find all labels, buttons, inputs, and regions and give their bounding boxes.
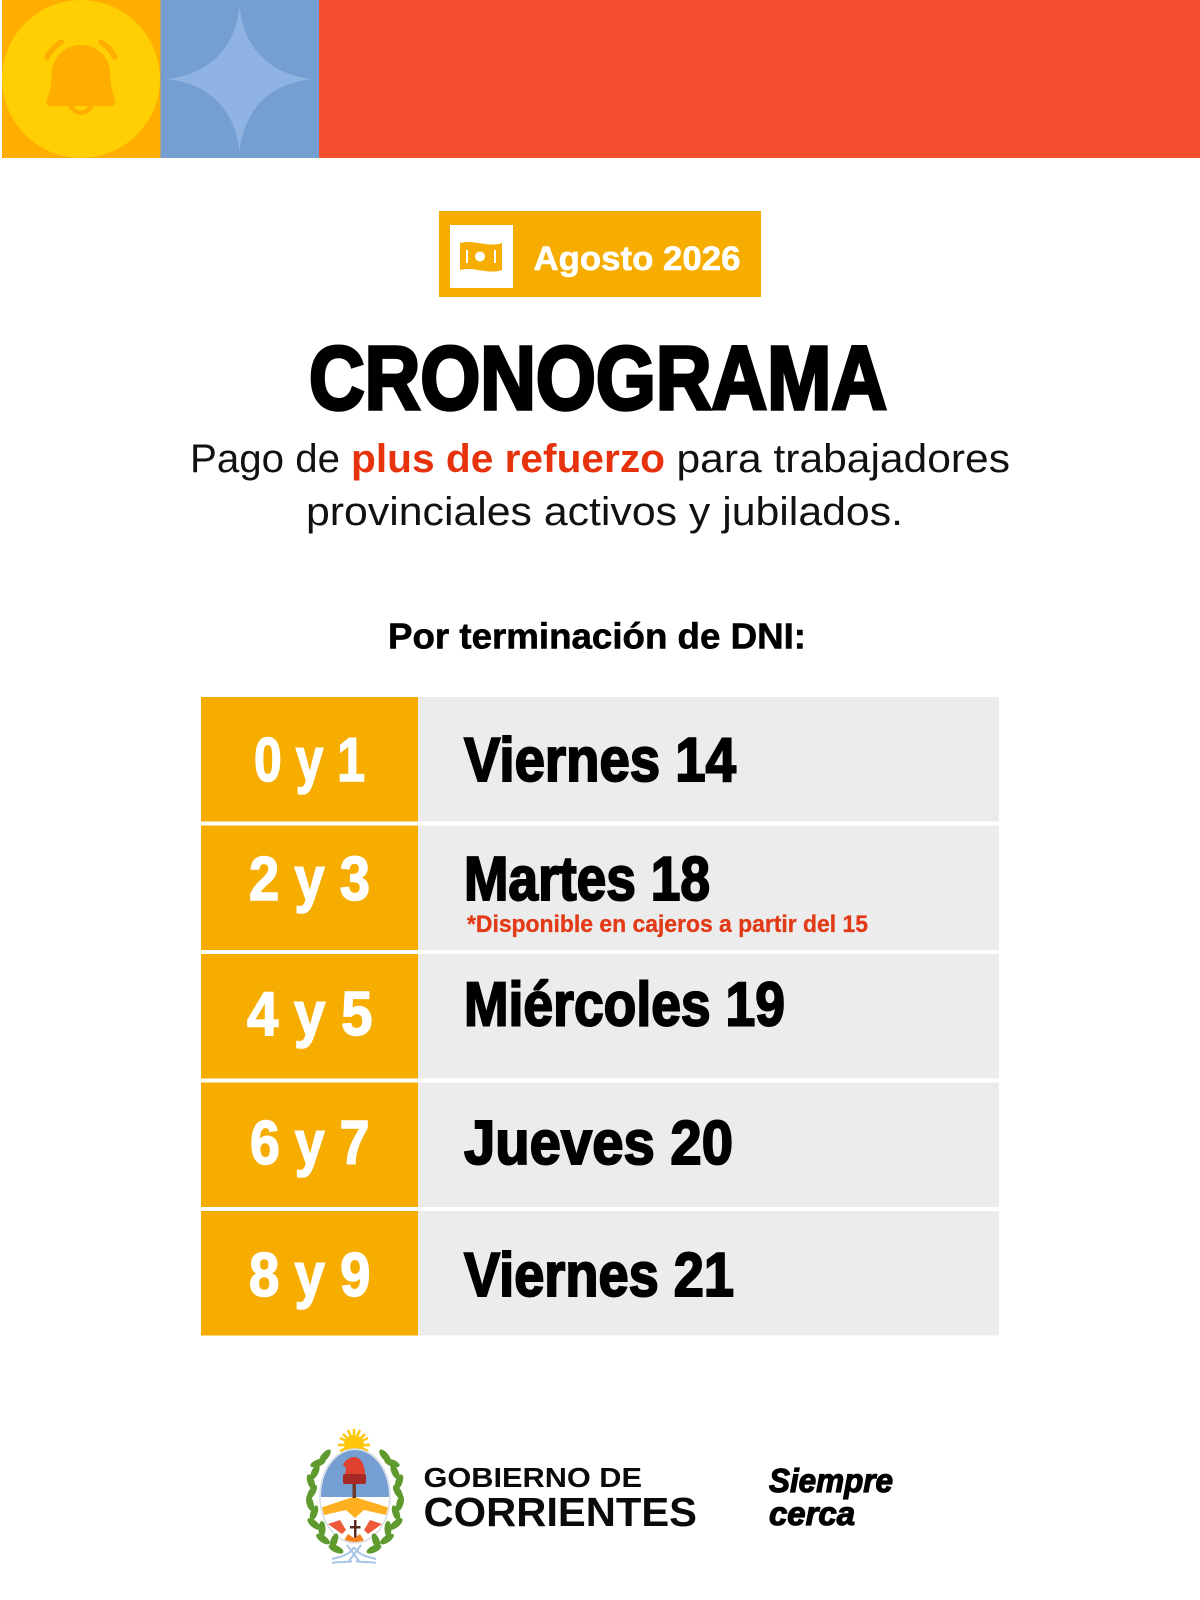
sun: [338, 1429, 370, 1457]
row: 2 y 3: 2 y 3: [249, 845, 370, 914]
row: 6 y 7: [201, 1082, 999, 1207]
subtitle: Pago de: [190, 437, 340, 481]
title: CRONOGRAMA: [309, 329, 887, 429]
slogan: Siempre: [769, 1462, 893, 1499]
slogan: cerca: [769, 1495, 855, 1532]
month badge: [439, 211, 761, 297]
row: 4 y 5: 4 y 5: [247, 980, 372, 1049]
ribbon: [332, 1545, 376, 1563]
row: 4 y 5: [201, 954, 999, 1078]
right branch: [365, 1448, 405, 1556]
row: 6 y 7: Jueves 20: [464, 1109, 733, 1178]
row: 8 y 9: Viernes 21: [464, 1241, 734, 1310]
shield: [320, 1449, 390, 1543]
row: 8 y 9: [201, 1211, 999, 1336]
laurel wreath: [305, 1448, 405, 1556]
subtitle: para trabajadores: [676, 437, 1010, 481]
row: 0 y 1: Viernes 14: [464, 726, 736, 795]
badge text: Agosto 2026: [534, 240, 740, 278]
subtitle: plus de refuerzo: [351, 437, 665, 481]
left branch: [305, 1448, 345, 1556]
footer logo: wordmark: [424, 1462, 697, 1535]
panel: bell tile: [2, 0, 160, 158]
subtitle: [190, 437, 1010, 534]
footer logo: coat of arms: [305, 1429, 405, 1563]
subtitle: provinciales activos y jubilados.: [306, 490, 903, 534]
icon: four-point star: [166, 5, 313, 153]
note: *Disponible en cajeros a partir del 15: [467, 911, 868, 938]
row: 0 y 1: [201, 697, 999, 822]
row: 2 y 3: Martes 18: [464, 845, 710, 914]
row: 2 y 3: [201, 826, 999, 950]
panel: red band: [319, 0, 1200, 158]
panel: star tile: [160, 0, 319, 158]
row: 4 y 5: Miércoles 19: [464, 970, 785, 1040]
icon: banknote: [450, 225, 513, 288]
row: 6 y 7: 6 y 7: [250, 1109, 370, 1178]
row: 0 y 1: 0 y 1: [254, 726, 365, 795]
section heading: Por terminación de DNI:: [388, 616, 806, 656]
row: 8 y 9: 8 y 9: [249, 1241, 370, 1310]
schedule table: [201, 697, 999, 1336]
header band: [2, 0, 1200, 158]
icon: bell: [46, 42, 116, 115]
Phrygian cap: [343, 1457, 365, 1475]
footer logo: wordmark: GOBIERNO DE: [424, 1462, 642, 1493]
slogan: [769, 1462, 893, 1532]
footer logo: wordmark: CORRIENTES: [424, 1489, 697, 1535]
